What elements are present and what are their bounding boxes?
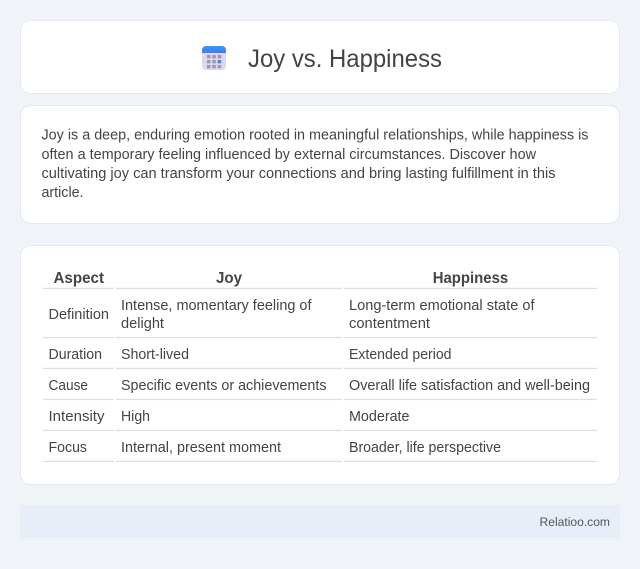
table row: cause [48, 378, 590, 394]
table row: focus: Broader, life perspective [349, 440, 501, 456]
text block: introduction paragraph: article. [42, 185, 84, 201]
table row: definition: Definition [48, 307, 109, 323]
table row: duration: Short-lived [121, 347, 189, 363]
table row: cause: Overall life satisfaction and well-being [349, 378, 590, 394]
table row: cause: Cause [48, 378, 88, 394]
table row: definition [48, 298, 535, 332]
text block: introduction paragraph: cultivating joy can transform your connections and bring lasting fulfillment in this [42, 166, 556, 182]
table header row [54, 270, 508, 287]
table header row: Happiness [433, 270, 508, 287]
table row: definition: delight [121, 316, 164, 332]
table row: intensity: Intensity [48, 409, 105, 425]
table row: focus: Focus [48, 440, 87, 456]
table row: definition: Long-term emotional state of [349, 298, 535, 314]
text block: introduction paragraph: often a temporary feeling influenced by external circumstances. Discover how [42, 147, 536, 163]
title: Joy vs. Happiness [248, 45, 442, 73]
table row: cause: Specific events or achievements [121, 378, 326, 394]
table header row: Aspect [54, 270, 104, 287]
panel: comparison table [20, 246, 620, 484]
table row: focus [48, 440, 501, 456]
table row: duration [48, 347, 452, 363]
table row: intensity: High [121, 409, 150, 425]
table row: intensity [48, 409, 410, 425]
footer text: site name: Relatioo.com [540, 515, 610, 529]
table row: duration: Duration [48, 347, 102, 363]
panel: title card [20, 20, 620, 94]
footer bar [20, 505, 620, 539]
text block: introduction paragraph [42, 128, 588, 201]
table row: definition: Intense, momentary feeling of [121, 298, 312, 314]
icon: calendar [202, 46, 226, 70]
text block: introduction paragraph: Joy is a deep, enduring emotion rooted in meaningful relationships, while happiness is [42, 128, 588, 144]
panel: introduction [20, 106, 620, 224]
table header row: Joy [216, 270, 242, 287]
table row: intensity: Moderate [349, 409, 410, 425]
table row: duration: Extended period [349, 347, 452, 363]
table row: definition: contentment [349, 316, 430, 332]
table row: focus: Internal, present moment [121, 440, 281, 456]
